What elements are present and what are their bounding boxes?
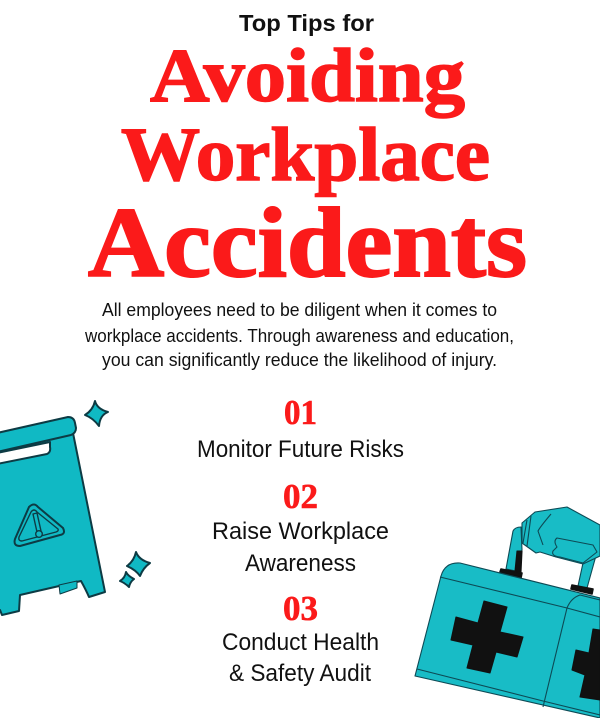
intro text block: All employees need to be diligent when it comes to xyxy=(102,300,497,320)
tip 03 xyxy=(222,589,379,687)
intro text block: you can significantly reduce the likelihood of injury. xyxy=(102,350,497,370)
title: Avoiding Workplace Accidents: Workplace xyxy=(121,113,490,197)
icon: sparkles xyxy=(85,401,150,587)
title: Avoiding Workplace Accidents xyxy=(88,34,527,298)
title: Avoiding Workplace Accidents: Avoiding xyxy=(150,34,465,118)
tip 02 xyxy=(212,477,389,577)
gloved hand xyxy=(522,507,600,564)
tip 01 xyxy=(197,393,404,463)
kit handle xyxy=(506,527,597,588)
intro text block xyxy=(84,300,514,370)
tip 02: Awareness xyxy=(245,550,356,577)
tip 01: 01 xyxy=(284,393,317,432)
clasps xyxy=(500,569,522,578)
tip 02: 02 xyxy=(283,477,318,516)
kit body xyxy=(415,563,600,718)
tip 03: Conduct Health xyxy=(222,629,379,656)
heading: Top Tips for: Top Tips for xyxy=(239,10,374,36)
tip 02: Raise Workplace xyxy=(212,518,389,545)
intro text block: workplace accidents. Through awareness and education, xyxy=(84,326,514,346)
tip 03: & Safety Audit xyxy=(229,660,371,687)
tip 01: Monitor Future Risks xyxy=(197,436,404,463)
icon: first aid kit held by hand xyxy=(415,507,600,718)
title: Avoiding Workplace Accidents: Accidents xyxy=(88,187,527,298)
crosses xyxy=(451,601,523,673)
tip 03: 03 xyxy=(283,589,318,628)
icon: caution floor sign xyxy=(0,417,105,615)
